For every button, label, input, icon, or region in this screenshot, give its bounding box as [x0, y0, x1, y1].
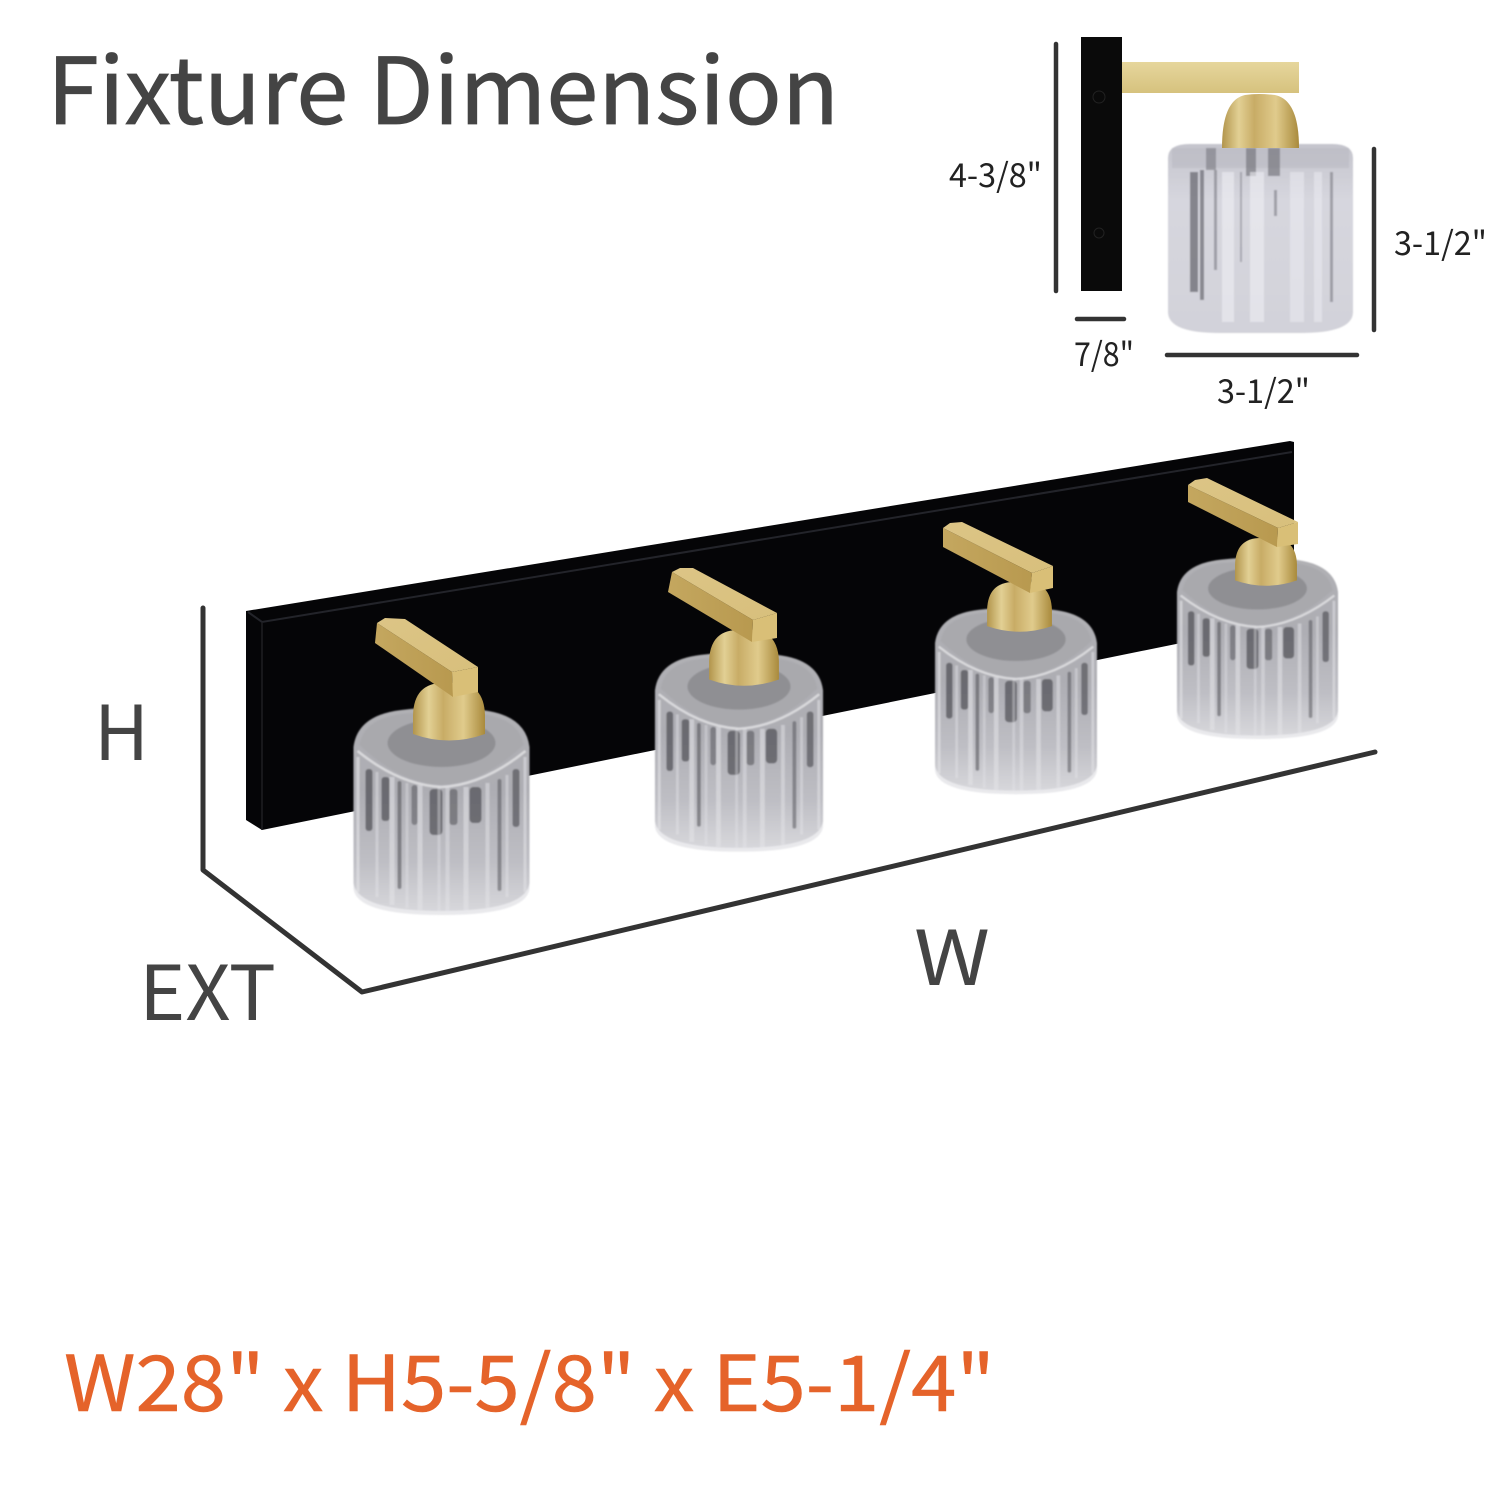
side glass shade — [1168, 144, 1353, 333]
title: Fixture Dimension — [47, 18, 839, 151]
side view dimension lines — [1056, 44, 1374, 355]
label: glass width: 3-1/2" — [1217, 365, 1310, 413]
lamp 1 — [354, 618, 530, 915]
lamp 4 — [1177, 478, 1338, 739]
wall plate — [246, 441, 1294, 830]
side dome — [1222, 94, 1299, 148]
side view fixture — [1081, 37, 1353, 333]
label: H: H — [94, 672, 149, 782]
overall dimensions: W28" x H5-5/8" x E5-1/4" — [64, 1323, 995, 1434]
side wall plate — [1081, 37, 1122, 291]
main fixture — [246, 441, 1338, 915]
lamp 3 — [935, 522, 1097, 794]
side arm — [1122, 62, 1299, 93]
label: glass height: 3-1/2" — [1394, 217, 1487, 265]
label: side height: 4-3/8" — [949, 149, 1042, 197]
lamp 2 — [655, 568, 823, 852]
label: EXT: EXT — [139, 932, 276, 1042]
label: W: W — [914, 897, 990, 1007]
dimension outline — [203, 608, 1375, 992]
label: plate depth: 7/8" — [1074, 328, 1134, 376]
